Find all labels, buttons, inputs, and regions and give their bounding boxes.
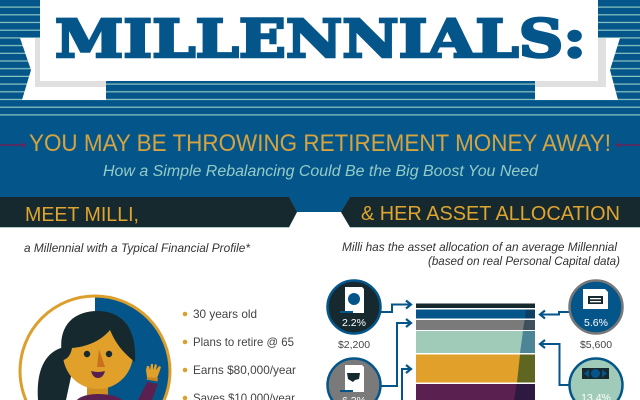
circle: 6.2% US bonds bbox=[328, 358, 380, 400]
bullet list: Earns $80,000/year bbox=[193, 363, 296, 377]
blue header band bbox=[0, 120, 640, 212]
ribbon: asset allocation bbox=[341, 197, 640, 228]
arrow: left bbox=[0, 142, 26, 148]
arrow: lower left to chart bbox=[402, 365, 411, 400]
icon: globe document bbox=[340, 287, 364, 313]
arrow: 6.2% to chart bbox=[380, 319, 411, 386]
bullet list bbox=[183, 307, 296, 400]
headline: YOU MAY BE THROWING RETIREMENT MONEY AWAY! bbox=[29, 130, 611, 157]
circle: 2.2% international bonds: 2.2% bbox=[342, 317, 366, 329]
title: MILLENNIALS: bbox=[55, 9, 586, 70]
ribbon: meet milli bbox=[0, 197, 297, 228]
icon: dollar bill bbox=[582, 368, 609, 379]
arrow: 2.2% to chart bbox=[380, 300, 411, 312]
right intro text: Milli has the asset allocation of an average Millennial bbox=[342, 240, 617, 254]
bullet list: 30 years old bbox=[193, 307, 257, 321]
right intro text bbox=[342, 240, 620, 268]
label: $5,600: $5,600 bbox=[580, 339, 612, 351]
label: $2,200: $2,200 bbox=[338, 339, 370, 351]
bullet list: Plans to retire @ 65 bbox=[193, 335, 294, 349]
circle: 5.6%: 5.6% bbox=[584, 317, 608, 329]
arrow: right bbox=[615, 142, 640, 148]
stacked allocation chart bbox=[416, 304, 535, 400]
subheadline: How a Simple Rebalancing Could Be the Big Boost You Need bbox=[103, 163, 539, 180]
right intro text: (based on real Personal Capital data) bbox=[428, 254, 620, 268]
ribbon: meet milli: MEET MILLI, bbox=[25, 203, 139, 226]
left intro text: a Millennial with a Typical Financial Profile* bbox=[24, 241, 250, 255]
icon: US map document bbox=[340, 365, 364, 392]
portrait of Milli bbox=[20, 296, 170, 400]
circle: 5.6% bbox=[570, 280, 622, 334]
arrow: 13.4% to chart bbox=[540, 340, 570, 385]
circle: 2.2% international bonds bbox=[328, 280, 380, 334]
circle: 13.4% cash bbox=[570, 358, 622, 400]
title banner bbox=[0, 0, 640, 122]
arrow: 5.6% to chart bbox=[540, 310, 570, 318]
ribbon: asset allocation: & HER ASSET ALLOCATION bbox=[361, 202, 620, 225]
icon: folder bbox=[583, 289, 608, 309]
